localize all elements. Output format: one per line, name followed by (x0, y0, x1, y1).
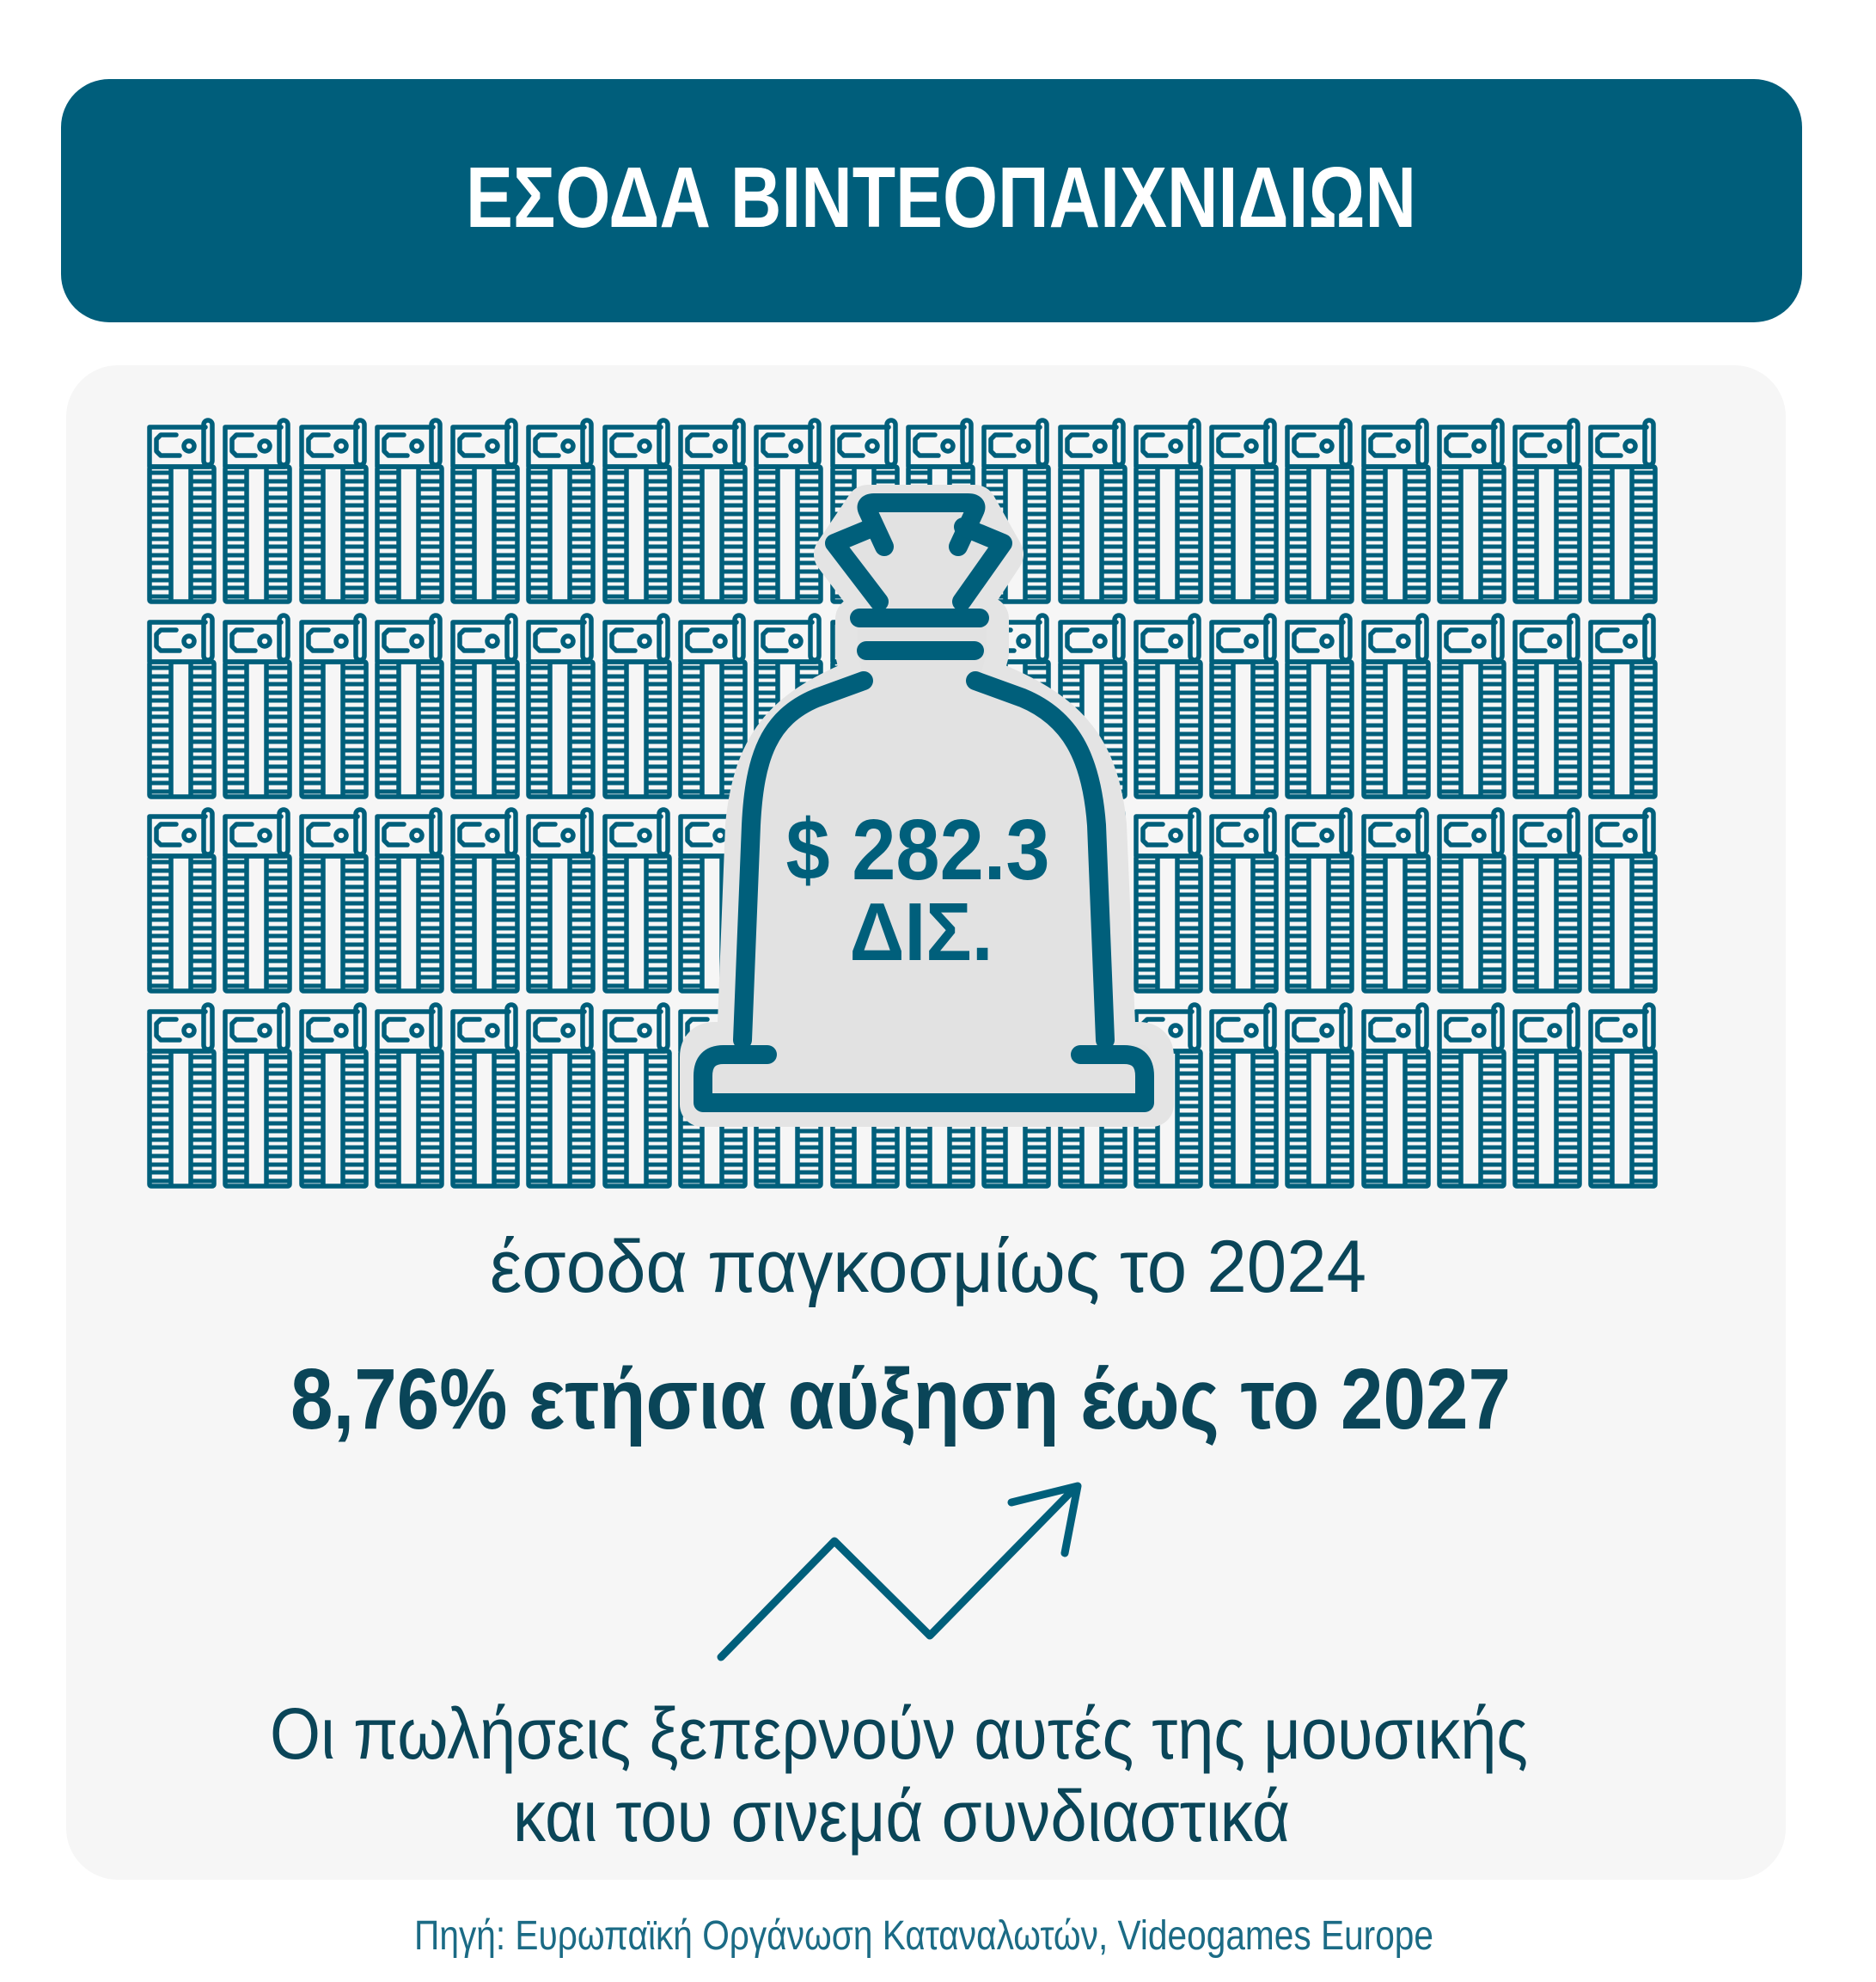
arrow: growth trend (721, 1486, 1078, 1657)
knot loop (867, 503, 975, 547)
neck bands (859, 609, 980, 627)
text: worldwide revenue: έσοδα παγκοσμίως το 2024 (490, 1226, 1366, 1308)
icon: money bag (702, 503, 1152, 1104)
text: annual growth: 8,76% ετήσια αύξηση έως το 2027 (290, 1351, 1511, 1447)
text: sales comparison (270, 1693, 1528, 1857)
text: sales comparison: Οι πωλήσεις ξεπερνούν αυτές της μουσικής (270, 1693, 1528, 1774)
title: ΕΣΟΔΑ ΒΙΝΤΕΟΠΑΙΧΝΙΔΙΩΝ (466, 150, 1416, 246)
body sides (742, 681, 864, 1040)
base (703, 1055, 1145, 1103)
main panel (66, 365, 1786, 1880)
money stacks grid (150, 420, 1655, 1186)
text: sales comparison: και του σινεμά συνδιαστικά (513, 1776, 1290, 1857)
icon: money bag: ΔΙΣ. (849, 886, 993, 978)
source note: Πηγή: Ευρωπαϊκή Οργάνωση Καταναλωτών, Videogames Europe (414, 1913, 1433, 1959)
bag amount: $ 282.3 (785, 802, 1050, 898)
header banner (61, 79, 1802, 322)
